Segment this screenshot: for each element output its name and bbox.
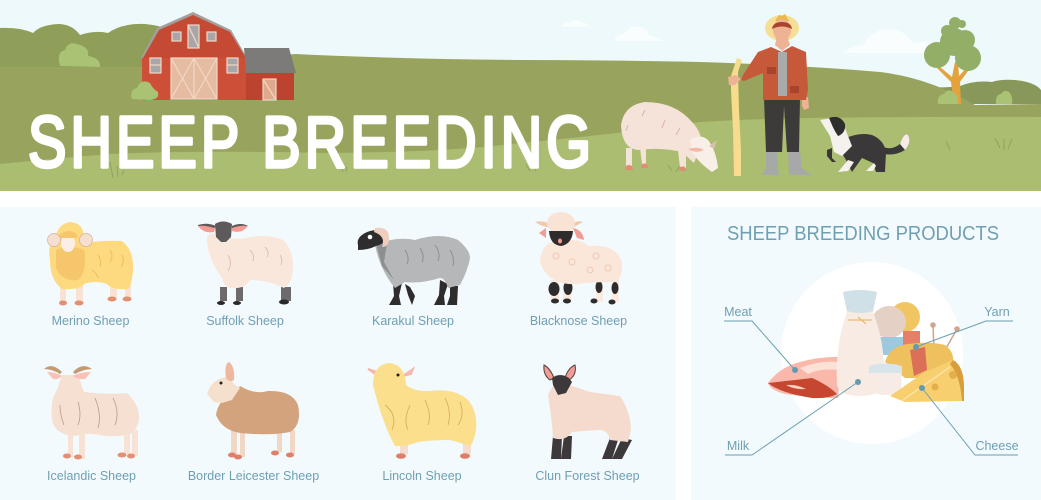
- chest and head: [820, 118, 852, 156]
- border leicester label: Border Leicester Sheep: [188, 469, 319, 483]
- tail: [880, 134, 909, 154]
- milk label: Milk: [727, 439, 750, 453]
- barn doors: [150, 25, 276, 100]
- front meadow: [0, 117, 1041, 191]
- border leicester sheep: [207, 362, 299, 460]
- meat: [768, 357, 842, 398]
- annex roof: [244, 48, 296, 73]
- cheese label: Cheese: [975, 439, 1019, 453]
- trousers: [764, 98, 800, 152]
- bushes: right: [938, 90, 1012, 104]
- yarn label: Yarn: [984, 305, 1010, 319]
- grazing sheep: [621, 102, 718, 172]
- hands: [728, 75, 809, 110]
- products heading: SHEEP BREEDING PRODUCTS: [727, 222, 999, 245]
- boots: [762, 151, 811, 175]
- panel: farm banner: [0, 0, 1041, 191]
- border collie: [820, 117, 909, 172]
- milk jug: [837, 290, 884, 396]
- suffolk sheep: [198, 222, 293, 305]
- merino label: Merino Sheep: [52, 314, 129, 328]
- white circle: [781, 262, 963, 444]
- yarn: [872, 302, 960, 378]
- blacknose sheep: [535, 212, 622, 304]
- lincoln sheep: [368, 363, 476, 459]
- walking stick: [731, 58, 742, 176]
- panel: sheep breeds: [0, 207, 676, 500]
- karakul label: Karakul Sheep: [372, 314, 454, 328]
- jacket: [741, 46, 808, 100]
- panel: products: [691, 207, 1041, 500]
- merino sheep: [48, 222, 133, 306]
- icelandic label: Icelandic Sheep: [47, 469, 136, 483]
- karakul sheep: [358, 228, 470, 305]
- callout dots: [792, 344, 925, 391]
- mid hill: [0, 54, 1041, 191]
- hat and face: [765, 15, 799, 41]
- barn: [141, 12, 296, 100]
- bush: left: [59, 43, 100, 67]
- clouds: [562, 20, 941, 53]
- blacknose label: Blacknose Sheep: [530, 314, 627, 328]
- clun forest sheep: [544, 365, 632, 459]
- farmer: [728, 14, 811, 176]
- back bushes right: [918, 80, 1041, 104]
- back legs and body: [840, 134, 886, 172]
- knitting needles: [933, 325, 957, 350]
- cheese: [890, 360, 964, 402]
- suffolk label: Suffolk Sheep: [206, 314, 284, 328]
- bush: barn: [131, 81, 158, 100]
- clun forest label: Clun Forest Sheep: [535, 469, 640, 483]
- meat label: Meat: [724, 305, 752, 319]
- tree: [924, 17, 981, 104]
- lincoln label: Lincoln Sheep: [382, 469, 462, 483]
- icelandic sheep: [44, 366, 139, 460]
- front leg: [827, 148, 836, 162]
- title: SHEEP BREEDING: [28, 102, 595, 182]
- back hills left: [0, 24, 180, 80]
- glass of milk: [869, 364, 902, 395]
- callout lines: [724, 321, 1018, 455]
- grass tufts: [93, 64, 1012, 178]
